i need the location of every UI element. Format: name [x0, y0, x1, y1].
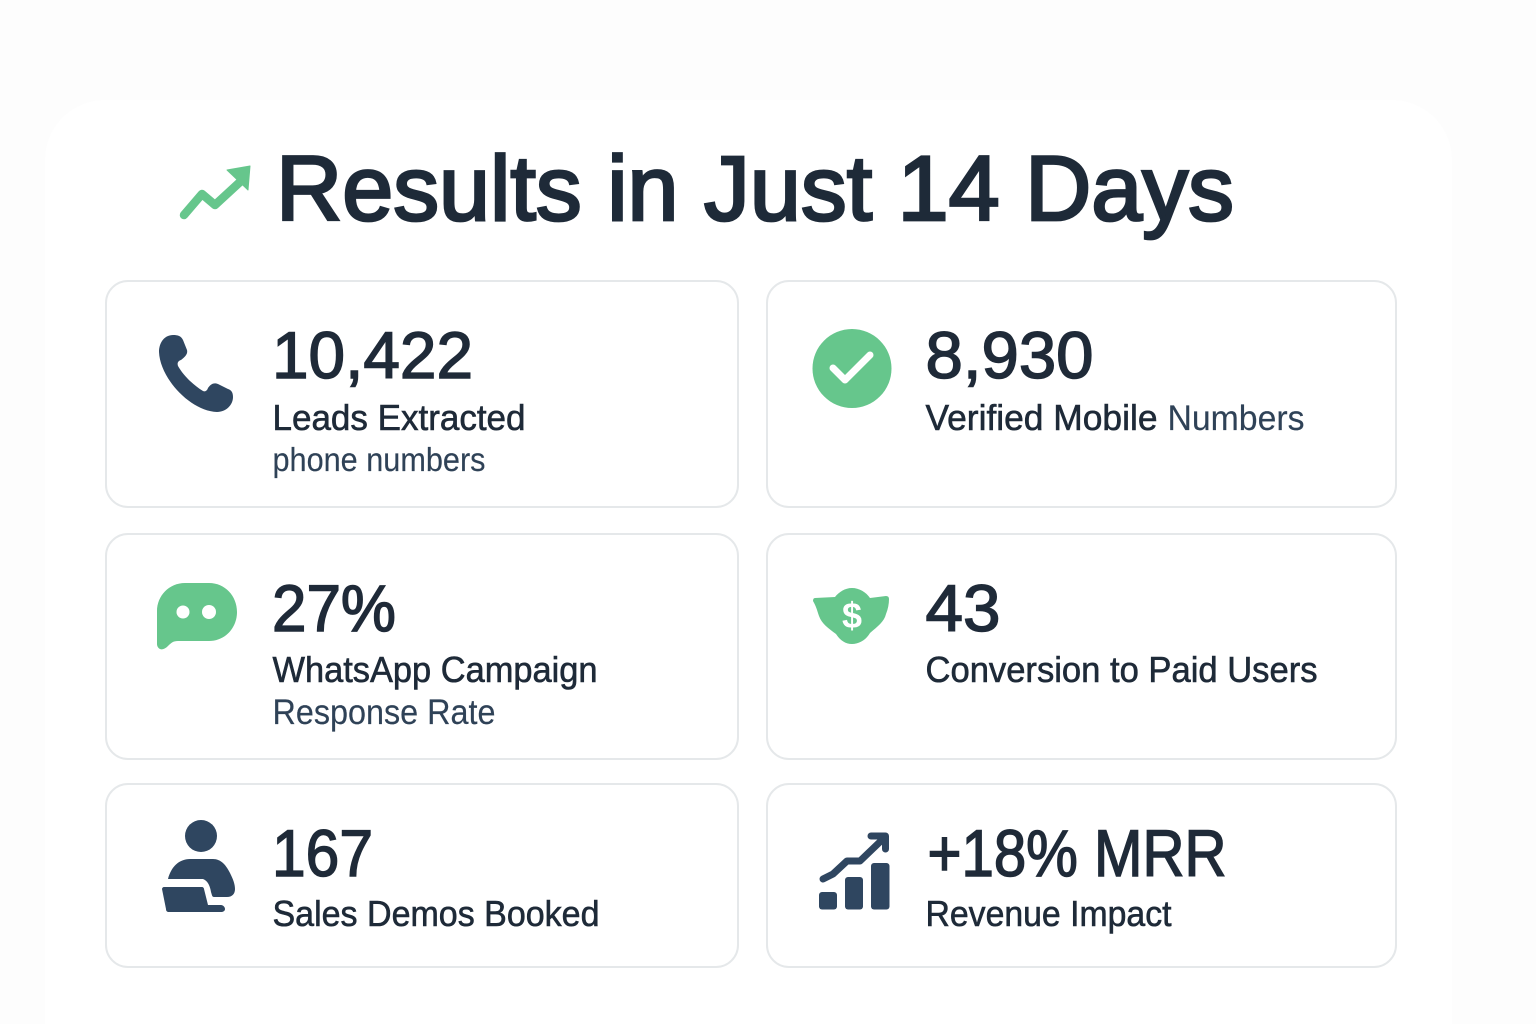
panel: whatsapp response rate [106, 534, 738, 759]
label: whatsapp campaign: WhatsApp Campaign [272, 649, 598, 690]
label: conversion to paid users: Conversion to Paid Users [926, 649, 1318, 690]
panel: sales demos booked [106, 784, 738, 967]
panel: revenue impact [767, 784, 1396, 967]
metric: 43: 43 [926, 571, 1000, 645]
icon: money wings: $ [842, 595, 862, 636]
label: sales demos booked: Sales Demos Booked [272, 893, 600, 934]
metric: 8,930: 8,930 [926, 318, 1094, 392]
label: verified mobile numbers: Numbers [1168, 399, 1304, 438]
sublabel: phone numbers: phone numbers [272, 441, 486, 478]
icon: growth chart [819, 836, 890, 910]
sublabel: response rate: Response Rate [272, 693, 496, 732]
title group [184, 138, 1234, 240]
icon: chat bubble [157, 583, 237, 649]
metric: +18% MRR: +18% MRR [928, 816, 1226, 890]
metric: 10,422: 10,422 [272, 318, 473, 392]
icon: person at laptop [162, 820, 235, 912]
icon: check circle [812, 329, 892, 408]
icon: money wings [813, 588, 889, 644]
panel: leads extracted [106, 281, 738, 507]
metric: 27%: 27% [272, 571, 396, 645]
label: revenue impact: Revenue Impact [926, 893, 1172, 934]
label: leads extracted: Leads Extracted [272, 397, 526, 438]
metric: 167: 167 [272, 816, 373, 890]
panel: conversion to paid users [767, 534, 1396, 759]
title: Results in Just 14 Days [276, 138, 1234, 240]
label: verified mobile numbers: Verified Mobile [926, 397, 1158, 438]
icon: phone [159, 335, 233, 412]
panel: verified mobile numbers [767, 281, 1396, 507]
icon: trending up arrow [184, 166, 250, 215]
label: verified mobile numbers [926, 397, 1304, 438]
